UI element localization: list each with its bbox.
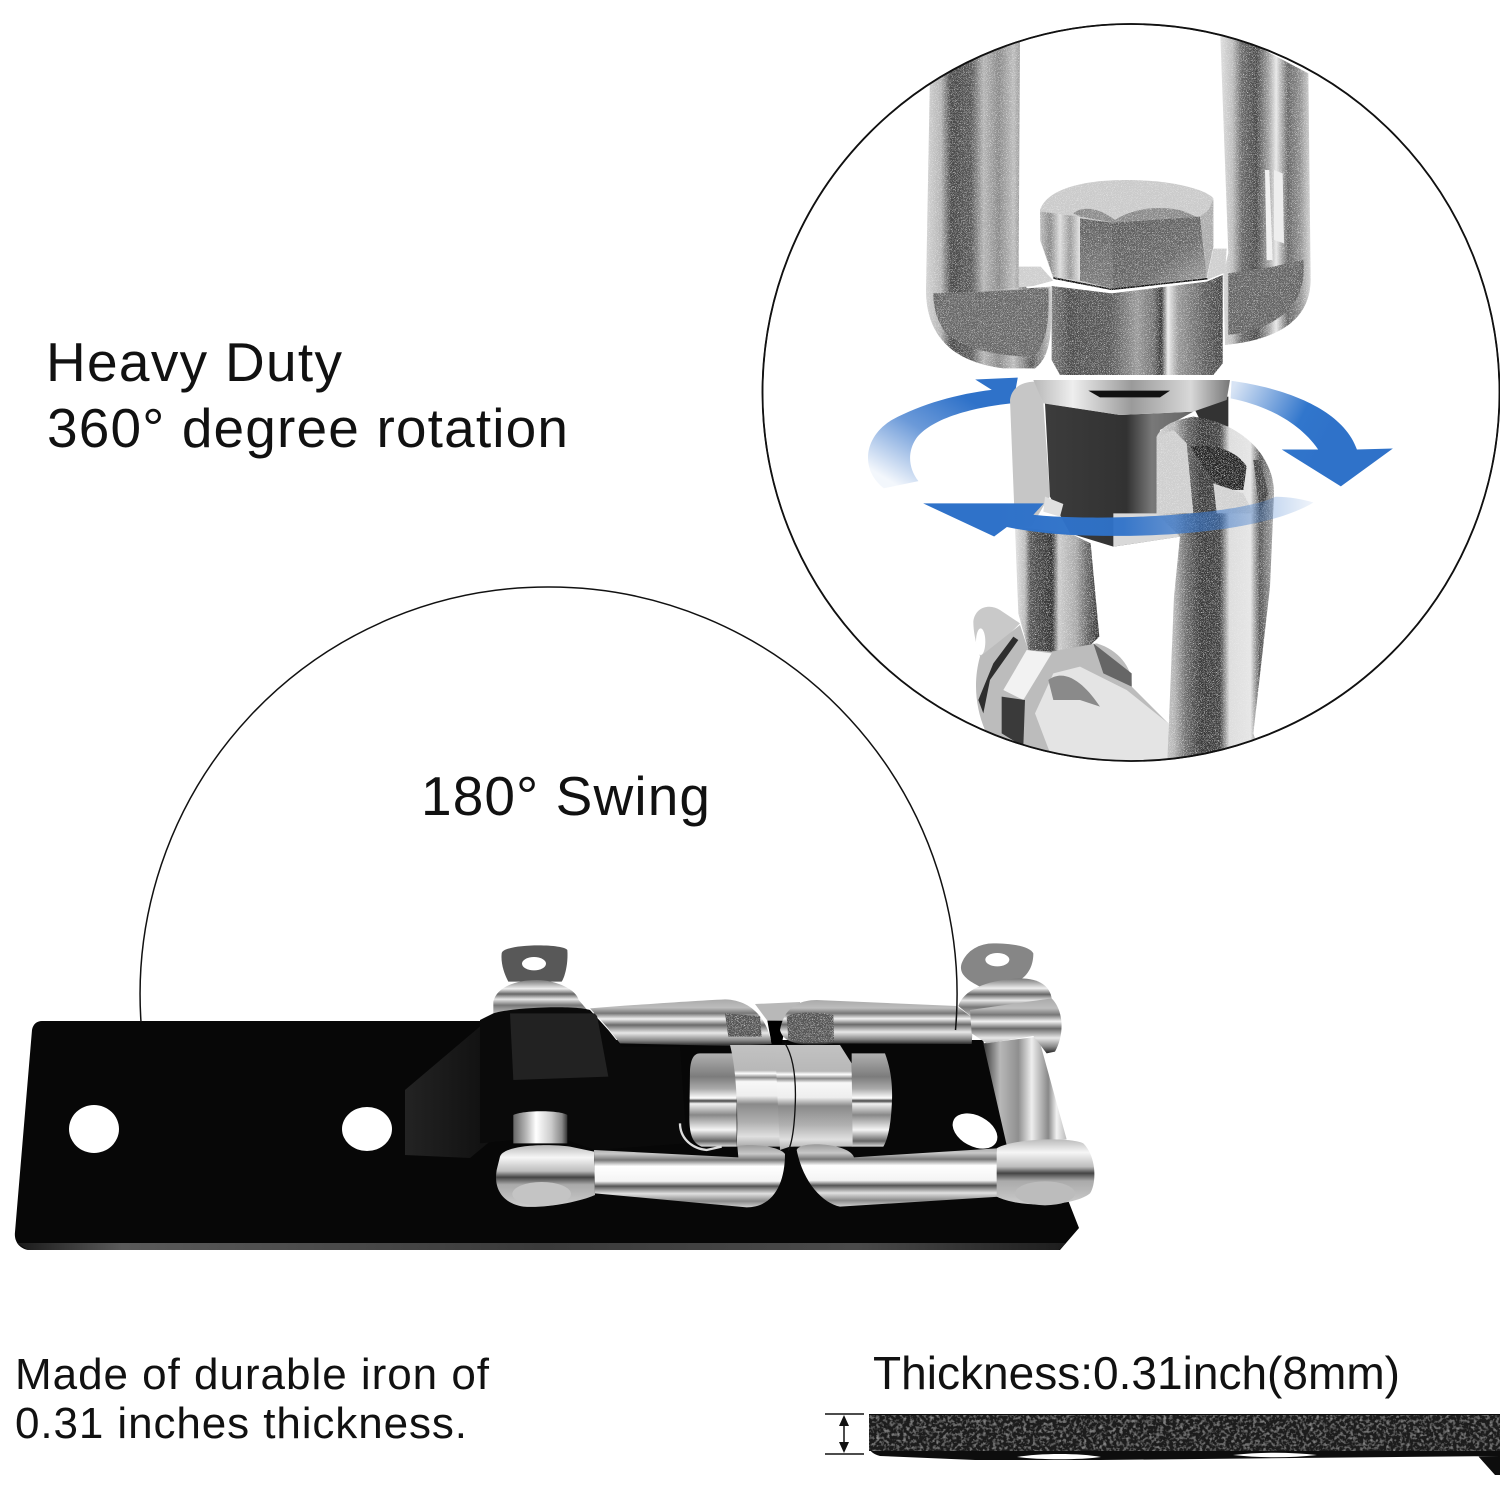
side view of plate edge (869, 1414, 1500, 1475)
ball of lower shackle, tab and diagonal arm (973, 607, 1170, 762)
heading: heavy duty 360 rotation (46, 331, 568, 459)
heading: heavy duty 360 rotation: 360° degree rotation (47, 397, 568, 459)
right band (775, 1045, 853, 1150)
collar (1052, 275, 1223, 375)
rotation arrow: bottom (923, 497, 1313, 537)
right prong (1220, 27, 1311, 345)
lower swivel body (973, 380, 1274, 762)
rotation arrows behind swivel (868, 378, 1393, 488)
right barrel (852, 1053, 892, 1147)
angle bracket left face (405, 1018, 540, 1158)
panel: circular close-up of swivel (762, 24, 1500, 762)
ring under collar (1033, 380, 1230, 415)
left tab (501, 945, 568, 982)
upper left arm (590, 999, 772, 1046)
left prong (926, 27, 1051, 368)
right threads and shoulder (958, 978, 1062, 1053)
grey back piece (755, 1002, 800, 1044)
lower left head (496, 1145, 595, 1207)
swing arc line (140, 587, 957, 1030)
right tab (961, 943, 1033, 987)
text: material note: 0.31 inches thickness. (15, 1399, 467, 1448)
upper yoke and bolt (926, 27, 1311, 375)
upper right arm (780, 1000, 973, 1045)
lower left arm (594, 1145, 785, 1207)
flange under bolt (988, 249, 1227, 291)
details in left half coordinates (480, 945, 800, 1207)
lower right arm with head (797, 1139, 1094, 1207)
left outer strip (1010, 382, 1050, 527)
left barrel (689, 1053, 737, 1147)
left lower pin (513, 1111, 567, 1143)
text: material note (15, 1350, 490, 1448)
text: thickness label: Thickness:0.31inch(8mm) (873, 1347, 1400, 1399)
text: material note: Made of durable iron of (15, 1350, 490, 1399)
heading: heavy duty 360 rotation: Heavy Duty (46, 331, 342, 393)
lower left arm (1015, 528, 1100, 652)
hex bolt head (1040, 180, 1213, 289)
right arm (1157, 417, 1274, 762)
right pin (983, 1037, 1067, 1145)
details in right half coordinates (775, 943, 1094, 1207)
dark swivel block (1043, 403, 1193, 547)
left band (730, 1045, 795, 1147)
left clasp line (680, 1123, 722, 1150)
plate hole in frame (947, 1106, 1003, 1156)
center split line (785, 1043, 795, 1151)
bracket body (480, 1007, 687, 1150)
label: 180 degree swing: 180° Swing (421, 765, 710, 827)
product: mounting plate with swivel shackles (15, 943, 1094, 1250)
black steel plate (15, 1021, 1079, 1250)
dimension arrow: thickness (825, 1414, 864, 1454)
shadow side behind right shoulder (1196, 396, 1228, 427)
left threads (493, 980, 587, 1015)
